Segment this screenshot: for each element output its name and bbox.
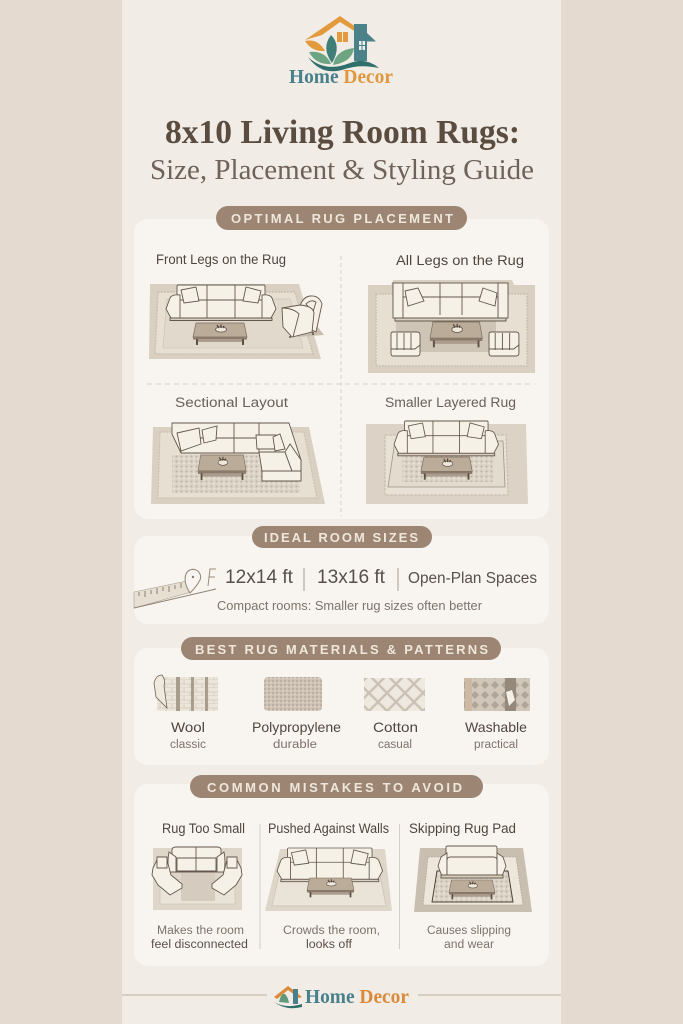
material: cotton: Cotton bbox=[373, 719, 418, 735]
layout: front legs on the rug: Front Legs on the Rug bbox=[156, 252, 286, 267]
pill heading: mistakes bbox=[190, 775, 483, 798]
footer bbox=[122, 986, 561, 1008]
title: 8x10 Living Room Rugs: bbox=[165, 114, 520, 151]
mistake: skipping rug pad: Causes slipping bbox=[427, 925, 511, 937]
mistake: pushed against walls: Pushed Against Walls bbox=[268, 821, 389, 836]
material: wool: classic bbox=[170, 739, 206, 751]
icon: tape measure bbox=[134, 569, 216, 608]
pill heading: optimal rug placement: OPTIMAL RUG PLACEMENT bbox=[231, 211, 453, 226]
footer wordmark: Home Decor bbox=[305, 986, 409, 1008]
mistake: rug too small: Makes the room bbox=[157, 925, 244, 937]
panel: common mistakes bbox=[134, 775, 549, 966]
mistake: skipping rug pad: Skipping Rug Pad bbox=[409, 821, 516, 836]
layout: smaller layered rug bbox=[366, 395, 528, 504]
center column bbox=[122, 0, 561, 1024]
sizes row bbox=[225, 567, 537, 591]
mistake: pushed against walls: Crowds the room, bbox=[283, 925, 380, 937]
sizes row: Open-Plan Spaces bbox=[408, 570, 537, 587]
mistake: pushed against walls bbox=[265, 821, 392, 951]
mistake: skipping rug pad: and wear bbox=[444, 939, 494, 951]
mistake: rug too small bbox=[151, 821, 248, 951]
pill heading: ideal room sizes: IDEAL ROOM SIZES bbox=[264, 530, 418, 545]
panel: optimal rug placement bbox=[134, 206, 549, 519]
material: wool: Wool bbox=[171, 719, 205, 735]
panel: rug materials bbox=[134, 637, 549, 765]
pill heading: materials: BEST RUG MATERIALS & PATTERNS bbox=[195, 642, 488, 657]
armchair bbox=[282, 296, 322, 338]
mistake: skipping rug pad bbox=[409, 821, 532, 951]
mistake: rug too small: feel disconnected bbox=[151, 939, 248, 951]
logo: Home Decor bbox=[289, 16, 393, 88]
material: washable bbox=[464, 678, 530, 751]
layout: front legs on the rug bbox=[149, 252, 324, 359]
material: polypropylene: Polypropylene bbox=[252, 719, 341, 735]
layout: smaller layered rug: Smaller Layered Rug bbox=[385, 395, 516, 410]
subtitle: Size, Placement & Styling Guide bbox=[150, 154, 534, 186]
pill heading: materials bbox=[181, 637, 501, 660]
material: cotton bbox=[364, 678, 425, 751]
footer logo icon bbox=[274, 986, 302, 1008]
mistake: rug too small: Rug Too Small bbox=[162, 821, 245, 836]
material: wool bbox=[154, 675, 218, 751]
sizes row: 12x14 ft bbox=[225, 567, 294, 588]
pill heading: optimal rug placement bbox=[216, 206, 467, 230]
layout: sectional: Sectional Layout bbox=[175, 395, 288, 410]
layout: all legs on the rug bbox=[368, 253, 535, 373]
note: Compact rooms: Smaller rug sizes often better bbox=[217, 599, 482, 613]
material: polypropylene bbox=[252, 677, 341, 751]
layout: sectional bbox=[151, 395, 325, 504]
sizes row: 13x16 ft bbox=[317, 567, 386, 588]
material: washable: Washable bbox=[465, 719, 527, 735]
material: polypropylene: durable bbox=[273, 739, 317, 751]
pill heading: mistakes: COMMON MISTAKES TO AVOID bbox=[207, 780, 462, 795]
icon: house with leaves bbox=[305, 16, 379, 71]
mistake: pushed against walls: looks off bbox=[306, 939, 353, 951]
material: cotton: casual bbox=[378, 739, 412, 751]
layout: all legs on the rug: All Legs on the Rug bbox=[396, 253, 524, 268]
pill heading: ideal room sizes bbox=[252, 526, 432, 548]
logo wordmark: Home Decor bbox=[289, 66, 393, 88]
panel: ideal room sizes bbox=[134, 526, 549, 624]
material: washable: practical bbox=[474, 739, 518, 751]
